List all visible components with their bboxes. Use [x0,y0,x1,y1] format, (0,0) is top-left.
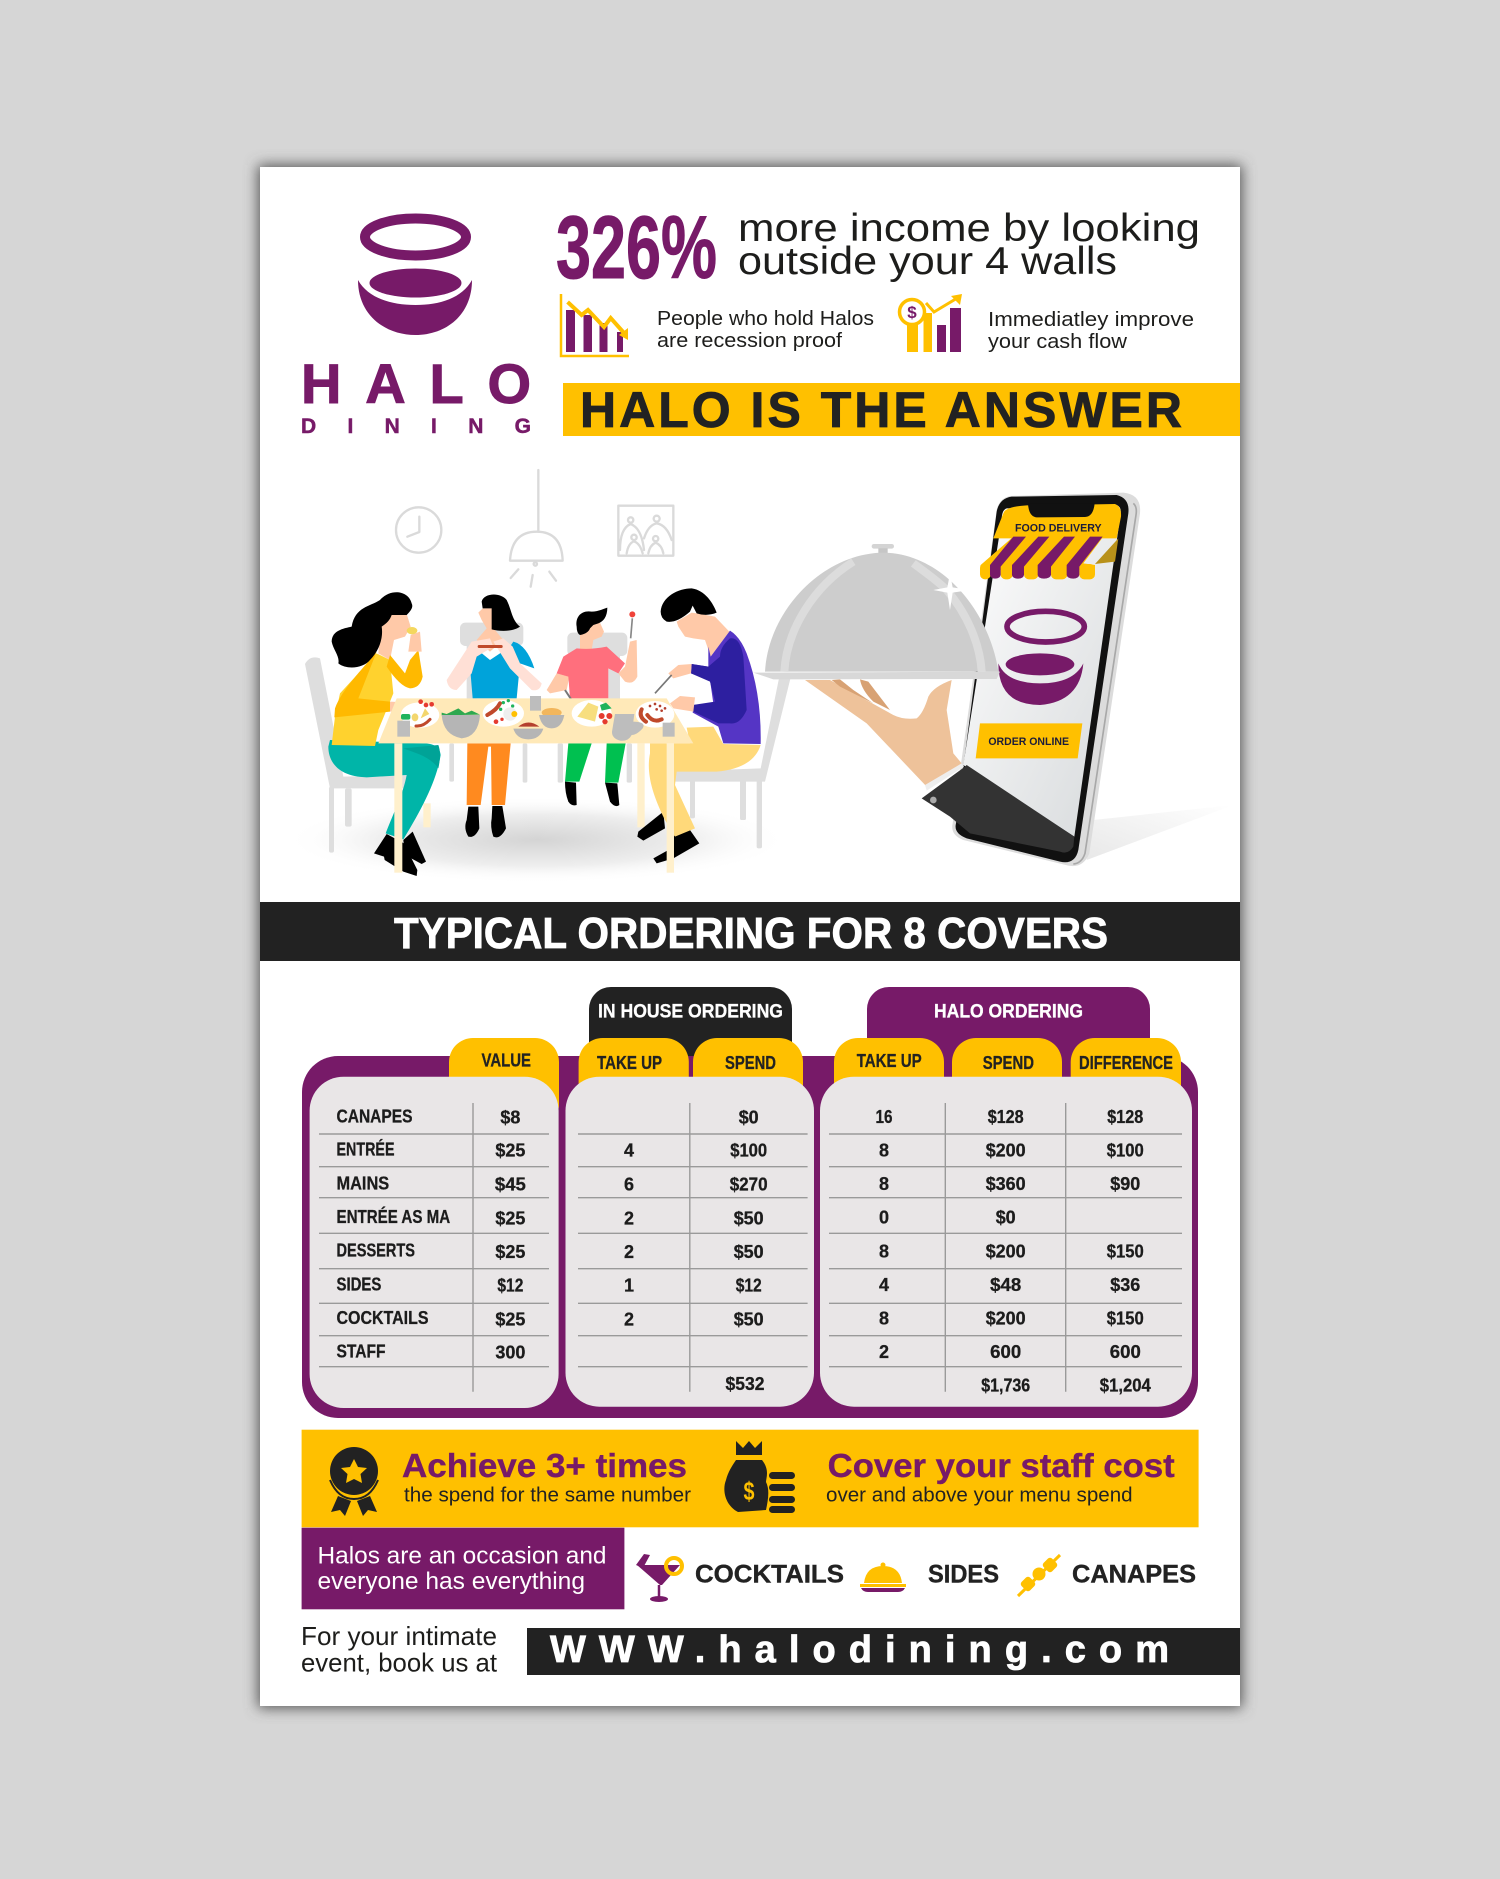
label: sides: SIDES [928,1561,999,1589]
panel: halo ordering table: $200 [986,1241,1026,1261]
panel: menu items and value: $25 [495,1309,525,1329]
callout: achieve 3+ times: Achieve 3+ times [402,1447,687,1484]
group tab: in house ordering: IN HOUSE ORDERING [598,1002,783,1023]
panel: halo ordering table: 8 [879,1241,889,1261]
panel: halo ordering table: $36 [1110,1275,1140,1295]
panel: halo ordering table: $128 [988,1107,1024,1127]
person: man in purple [637,588,761,863]
heading bar: typical ordering [260,902,1240,961]
text: recession proof: are recession proof [657,330,842,352]
panel: halo ordering table: 0 [879,1207,889,1227]
panel: menu items and value: $25 [495,1141,525,1161]
tab: difference [1071,1038,1181,1128]
illustration: family eating at table [283,470,792,883]
icon: wall clock [396,507,441,553]
callout: halos are an occasion: Halos are an occasion and [318,1542,606,1569]
panel: halo ordering table: $1,736 [981,1376,1030,1396]
callout: cover staff cost: Cover your staff cost [828,1447,1175,1484]
panel: menu items and value: STAFF [336,1341,386,1361]
panel: in house ordering table: $50 [734,1208,764,1228]
panel: halo ordering table: $128 [1107,1107,1143,1127]
panel: in house ordering table: $270 [730,1175,768,1195]
panel: halo ordering table: $360 [986,1174,1026,1194]
icon: money bag and coins: $ [744,1476,755,1506]
person: boy in pink [547,608,637,806]
phone notch [1028,503,1095,517]
tab: value: VALUE [482,1051,531,1071]
callout: achieve 3+ times [402,1447,691,1507]
panel: menu items and value: $45 [495,1175,526,1195]
panel: in house ordering table: $532 [726,1374,764,1394]
callout: halos are an occasion [302,1528,624,1609]
poster card [260,167,1240,1706]
headline text: outside your 4 walls [738,240,1117,283]
tab: difference: DIFFERENCE [1079,1053,1173,1073]
tab: halo spend: SPEND [983,1053,1034,1073]
icon: family picture frame [618,506,673,556]
panel: menu items and value: ENTRÉE [336,1139,394,1160]
icon: cocktail [636,1554,682,1602]
phone shadow [1087,805,1233,860]
panel: menu items and value: CANAPES [336,1106,412,1126]
panel: menu items and value: DESSERTS [336,1241,415,1261]
label: cocktails: COCKTAILS [695,1561,844,1589]
panel: halo ordering table: 16 [876,1107,892,1127]
icon: falling bar chart [561,294,629,356]
callout: halos are an occasion: everyone has everything [318,1568,585,1595]
panel: halo ordering table: $150 [1107,1241,1144,1261]
callout: cover staff cost [826,1447,1175,1507]
panel: in house ordering table: $50 [734,1242,764,1262]
awning [980,537,1103,579]
panel: halo ordering table: $150 [1107,1309,1144,1329]
panel: halo ordering table: 2 [879,1342,889,1362]
panel: halo ordering table: $1,204 [1100,1376,1151,1396]
panel: menu items and value: MAINS [336,1174,389,1194]
logo word HALO: HALO [301,352,531,415]
panel: in house ordering table: 2 [624,1309,634,1329]
panel: halo ordering table: $90 [1110,1174,1140,1194]
icon: pendant lamp [510,470,563,587]
hand and sleeve [805,679,1074,853]
panel: halo ordering table: $200 [986,1140,1026,1160]
column tabs [449,1038,1181,1128]
panel: in house ordering table: $50 [734,1309,764,1329]
panel: halo ordering table: 8 [879,1174,889,1194]
panel: in house ordering table: $0 [739,1107,759,1127]
callout: cover staff cost: over and above your menu spend [826,1485,1133,1507]
tab: halo spend [952,1038,1062,1128]
illustration: phone with food delivery and cloche [753,493,1233,866]
tab: halo take up [834,1038,944,1128]
panel: yellow benefits band [302,1430,1199,1527]
panel: in house ordering table: 1 [624,1275,634,1295]
panel: halo ordering table: 4 [879,1275,889,1295]
panel: menu items and value: 300 [495,1342,525,1362]
panel: halo ordering table: 8 [879,1140,889,1160]
icon: money bag and coins [724,1441,795,1513]
table backdrop [302,1056,1198,1418]
logo: Halo Dining [301,218,531,438]
panel: in house ordering table: $12 [736,1275,762,1295]
tab: in house take up: TAKE UP [597,1053,662,1073]
headline text [738,207,1200,283]
icon: halo bowl [358,218,472,335]
headline text: more income by looking [738,207,1200,250]
headline statistic 326%: 326% [556,197,717,297]
panel: halo ordering table: 8 [879,1309,889,1329]
person: woman in yellow [328,592,441,876]
panel: halo ordering table: $48 [990,1275,1021,1295]
website bar: WWW.halodining.com [550,1629,1169,1671]
dining table [378,698,693,873]
panel: in house ordering table: 2 [624,1208,634,1228]
phone [952,493,1140,866]
icon: serving cloche [860,1562,906,1592]
phone logo [998,611,1084,705]
tab: in house spend: SPEND [725,1053,776,1073]
group tab: halo ordering: HALO ORDERING [934,1002,1083,1023]
icon: skewer [1018,1555,1060,1596]
panel: in house ordering table [566,1077,814,1407]
group tab: in house ordering [589,987,792,1077]
tab: in house take up [579,1038,689,1128]
panel: in house ordering table: 4 [624,1141,634,1161]
chairs [305,623,792,853]
panel: menu items and value: $25 [495,1242,525,1262]
heading bar: typical ordering: TYPICAL ORDERING FOR 8 COVERS [394,909,1108,958]
label: food delivery: FOOD DELIVERY [1015,523,1102,535]
panel: in house ordering table: $100 [730,1141,767,1161]
logo word DINING: DINING [301,415,531,438]
group tab: halo ordering [867,987,1150,1077]
tab: in house spend [693,1038,803,1128]
text: recession proof [657,308,874,352]
panel: menu items and value: ENTRÉE AS MA [336,1206,450,1227]
label: canapes: CANAPES [1072,1561,1196,1589]
panel: menu items and value: $25 [495,1208,525,1228]
panel: menu items and value: $8 [500,1107,520,1127]
panel: in house ordering table: 6 [624,1175,634,1195]
text: recession proof: People who hold Halos [657,308,874,330]
panel: in house ordering table: 2 [624,1242,634,1262]
cloche [753,544,1000,679]
text: for your intimate event [301,1621,498,1678]
icon: rising bar chart with coin [900,294,962,352]
floor shadow [283,797,790,883]
button: order online [976,723,1082,758]
panel: halo ordering table: $100 [1107,1140,1144,1160]
tab: halo take up: TAKE UP [857,1051,922,1071]
panel: menu items and value: SIDES [336,1274,381,1294]
panel: halo ordering table: 600 [1110,1342,1141,1362]
panel: menu items and value: COCKTAILS [336,1308,428,1328]
panel: menu items and value [310,1077,559,1408]
text: for your intimate event: For your intimate [301,1621,497,1651]
tab: value [449,1038,559,1128]
icon: award medal [330,1447,378,1516]
food on table [397,696,675,741]
panel: halo ordering table [820,1077,1192,1407]
panel: halo ordering table: 600 [990,1342,1021,1362]
callout: achieve 3+ times: the spend for the same number [404,1485,691,1507]
text: cash flow: Immediatley improve [988,309,1194,331]
person: woman in blue [447,595,542,837]
panel: halo ordering table: $200 [986,1309,1026,1329]
text: cash flow [988,309,1194,353]
button: order online: ORDER ONLINE [988,736,1069,748]
panel: menu items and value: $12 [497,1275,523,1295]
banner: Halo is the answer: HALO IS THE ANSWER [580,382,1182,438]
text: for your intimate event: event, book us at [301,1648,498,1678]
icon: rising bar chart with coin: $ [907,303,917,322]
text: cash flow: your cash flow [988,331,1128,353]
table back legs [423,743,645,827]
panel: halo ordering table: $0 [996,1207,1016,1227]
